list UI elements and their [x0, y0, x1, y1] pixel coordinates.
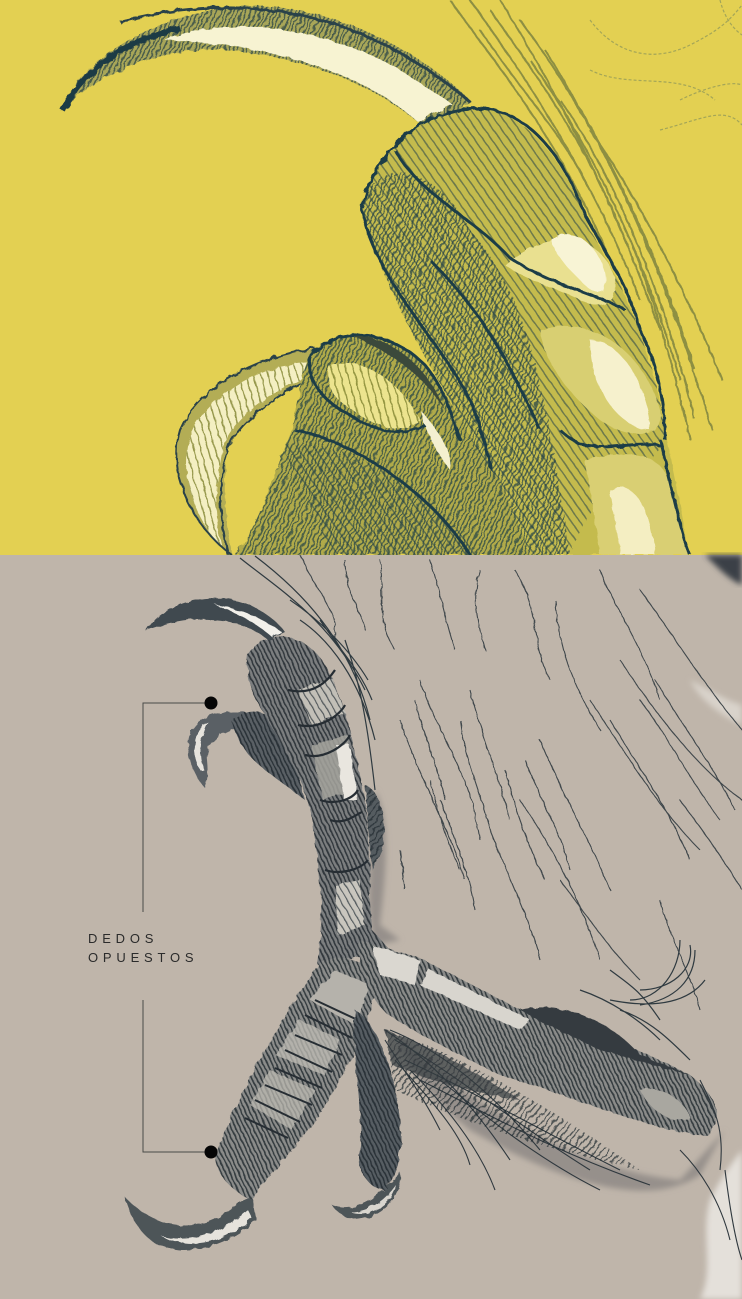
panel: grey talon and leg illustration	[0, 555, 742, 1299]
callout dot: lower	[204, 1146, 218, 1158]
side toe toward body	[359, 940, 716, 1135]
dark top corner	[705, 555, 742, 585]
upper talon	[146, 598, 285, 640]
callout: dedos opuestos	[88, 696, 218, 1158]
large claw	[60, 6, 472, 128]
panel: yellow close-up of talon	[0, 0, 742, 555]
leg shadow	[369, 790, 725, 1191]
dark under-leg feathers	[385, 1030, 640, 1170]
small claw	[177, 348, 335, 555]
callout connector lines	[143, 703, 211, 1152]
feather strands	[450, 0, 722, 440]
small toe	[235, 335, 530, 555]
inner toe	[331, 1010, 400, 1220]
pale body patches	[690, 680, 742, 1299]
callout label: OPUESTOS	[88, 950, 198, 965]
main toe	[362, 108, 690, 555]
callout dot: upper	[204, 696, 218, 710]
back toes fork	[215, 958, 376, 1200]
leg segment ink	[288, 670, 368, 872]
rear claw	[124, 1196, 256, 1250]
faint body sketch lines	[590, 0, 742, 130]
body fur sketch lines	[300, 555, 742, 1010]
back toe segment ink	[245, 1000, 362, 1138]
main leg and upper toe	[247, 637, 390, 965]
hanging feathers under leg	[385, 1030, 742, 1260]
main toe ink lines	[362, 108, 690, 555]
small front toe	[232, 711, 305, 800]
second talon	[188, 712, 245, 788]
feather tuft at leg	[240, 556, 705, 1060]
callout label: DEDOS	[88, 931, 158, 946]
